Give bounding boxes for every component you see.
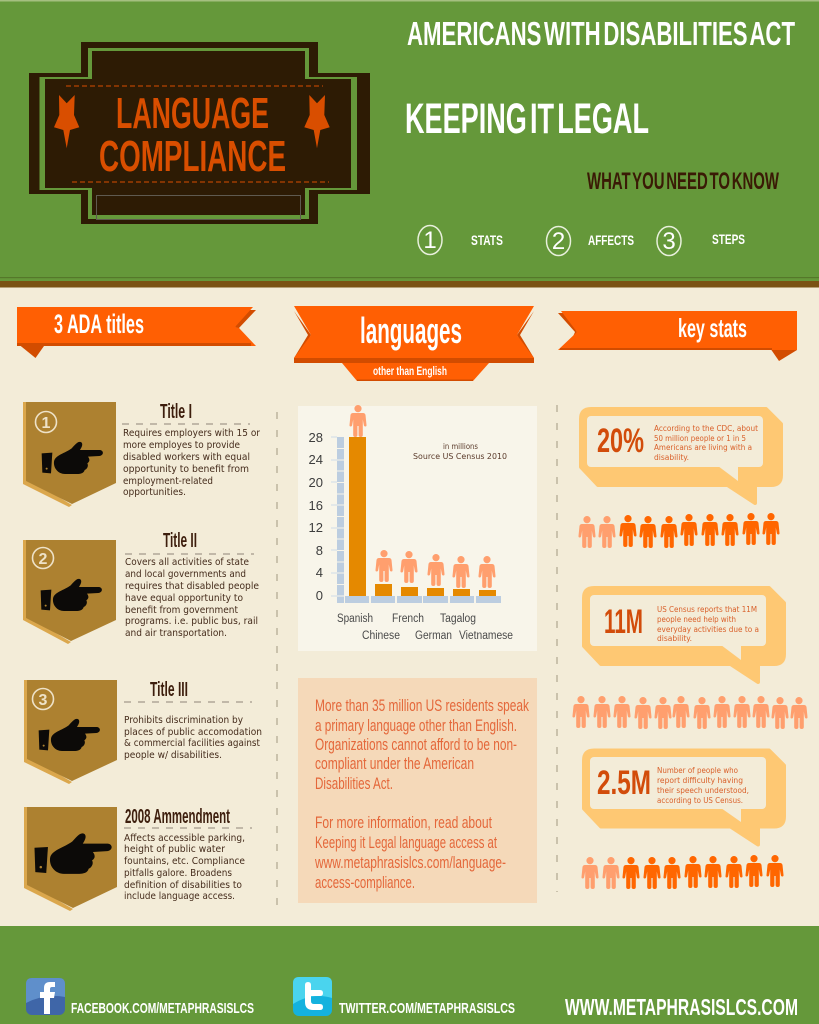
chart axis xyxy=(331,437,501,603)
callout: 20 percent: disability. xyxy=(654,453,689,462)
icon: left star xyxy=(54,95,79,148)
callout: 11M: everyday activities due to a xyxy=(657,625,759,634)
panel: title II xyxy=(23,530,259,644)
badge title: LANGUAGE xyxy=(116,89,269,138)
heading: keeping it legal: KEEPING IT LEGAL xyxy=(405,95,649,143)
text: facebook url: FACEBOOK.COM/METAPHRASISLCS xyxy=(71,1000,254,1017)
icon: chevron with pointing hand 2 xyxy=(23,540,116,644)
icon: chevron with pointing hand 2: 2 xyxy=(39,551,48,568)
label: steps: STEPS xyxy=(712,231,745,247)
chart axis labels: 20 xyxy=(309,475,323,490)
callout: 2.5M: their speech understood, xyxy=(657,786,749,795)
chart category labels: Chinese xyxy=(362,630,400,642)
text: title II description: and air transportation. xyxy=(125,628,227,639)
chart category labels: Tagalog xyxy=(440,613,476,625)
chart axis labels: 4 xyxy=(316,565,323,580)
people row: 2 of 10 xyxy=(578,513,780,548)
chart axis labels: 28 xyxy=(309,430,323,445)
callout: 20 percent: 50 million people or 1 in 5 xyxy=(654,434,746,443)
text: amendment description: fountains, etc. Compliance xyxy=(124,856,245,867)
text: amendment description xyxy=(124,833,245,902)
panel: 2008 amendment xyxy=(24,806,252,911)
ribbon: languages xyxy=(294,306,534,381)
text: title II description: programs. i.e. public bus, rail xyxy=(125,616,258,627)
panel: language access note: Organizations cannot afford to be non- xyxy=(315,735,517,754)
heading: title II: Title II xyxy=(163,530,197,552)
text: title I description xyxy=(123,428,260,498)
ribbon: languages: languages xyxy=(360,310,462,351)
icon: number 1 xyxy=(418,226,442,254)
chart axis labels: 24 xyxy=(309,452,323,467)
header band xyxy=(0,0,819,288)
icon: chevron with pointing hand 1 xyxy=(23,402,116,507)
badge: language compliance xyxy=(29,42,370,224)
panel: language access note: For more information, read about xyxy=(315,813,492,832)
icon: number 2: 2 xyxy=(552,228,565,255)
panel: language access note: compliant under the American xyxy=(315,754,474,773)
callout: 11M: 11M xyxy=(604,603,643,641)
text: title I description: opportunity to benefit from xyxy=(123,464,249,475)
chart axis labels: 16 xyxy=(309,498,323,513)
text: title I description: more employes to provide xyxy=(123,440,240,451)
icon: facebook xyxy=(26,978,65,1015)
panel: title III xyxy=(24,679,262,784)
callout: 11M: disability. xyxy=(657,634,692,643)
section index xyxy=(418,226,745,256)
ribbon: 3 ADA titles: 3 ADA titles xyxy=(54,309,144,339)
text: title I description: Requires employers with 15 or xyxy=(123,428,260,439)
ribbon: 3 ADA titles xyxy=(17,307,256,358)
icon: number 3: 3 xyxy=(662,228,676,255)
callout: 2.5M xyxy=(584,750,784,844)
text: title II description: and local governments and xyxy=(125,569,246,580)
panel: language access note: a primary language other than English. xyxy=(315,716,517,735)
chart note xyxy=(413,442,507,461)
heading: title I: Title I xyxy=(160,401,192,423)
callout: 20 percent xyxy=(581,409,781,503)
chart category labels xyxy=(337,613,513,642)
panel: language access note: Keeping it Legal language access at xyxy=(315,833,497,852)
chart category labels: Spanish xyxy=(337,613,373,625)
text: title II description: have equal opportunity to xyxy=(125,593,243,604)
heading: title III: Title III xyxy=(150,679,188,701)
footer band xyxy=(0,926,819,1024)
text: title I description: disabled workers with equal xyxy=(123,452,250,463)
text: title II description: requires that disabled people xyxy=(125,581,259,592)
text: title III description: people w/ disabilities. xyxy=(124,750,222,761)
icon: chevron with pointing hand 4 xyxy=(24,807,117,911)
callout: 2.5M: Number of people who xyxy=(657,766,738,775)
icon: chevron with pointing hand 3: 3 xyxy=(39,692,48,709)
text: twitter url: TWITTER.COM/METAPHRASISLCS xyxy=(339,1000,515,1017)
callout: 2.5M: 2.5M xyxy=(597,764,651,802)
text: amendment description: height of public water xyxy=(124,844,225,855)
ribbon: languages: other than English xyxy=(373,364,447,378)
callout: 11M: US Census reports that 11M xyxy=(657,605,757,614)
icon: right star xyxy=(304,95,330,148)
text: title I description: employment-related xyxy=(123,476,213,487)
chart category labels: French xyxy=(392,613,424,625)
text: title III description xyxy=(124,715,262,761)
callout: 11M xyxy=(584,588,784,682)
chart axis labels xyxy=(309,430,323,603)
chart person icons xyxy=(349,405,496,588)
chart category labels: German xyxy=(415,630,452,642)
panel: title I xyxy=(23,401,260,507)
label: affects: AFFECTS xyxy=(588,232,634,248)
chart axis labels: 0 xyxy=(316,588,323,603)
callout: 20 percent: 20% xyxy=(597,422,644,460)
icon: chevron with pointing hand 3 xyxy=(24,680,117,784)
chart category labels: Vietnamese xyxy=(459,630,513,642)
text: title II description: Covers all activities of state xyxy=(125,557,249,568)
panel: language access note: Disabilities Act. xyxy=(315,774,393,793)
chart axis labels: 8 xyxy=(316,543,323,558)
callout: 11M: people need help with xyxy=(657,615,736,624)
divider: right dashed line xyxy=(556,405,558,892)
label: stats: STATS xyxy=(471,232,503,248)
text: title I description: opportunities. xyxy=(123,487,186,498)
heading: 2008 ammendment: 2008 Ammendment xyxy=(125,806,230,828)
ribbon: key stats: key stats xyxy=(678,313,747,343)
icon: number 2 xyxy=(546,226,570,256)
icon: twitter xyxy=(293,977,332,1016)
panel: language access note xyxy=(298,678,537,903)
text: amendment description: definition of disabilities to xyxy=(124,880,242,891)
text: amendment description: pitfalls galore. Broadens xyxy=(124,868,232,879)
text: title III description: Prohibits discrimination by xyxy=(124,715,243,726)
ribbon: key stats xyxy=(558,311,797,361)
badge: language compliance: COMPLIANCE xyxy=(99,132,286,181)
callout: 2.5M: report difficulty having xyxy=(657,776,743,785)
callout: 20 percent: Americans are living with a xyxy=(654,443,752,452)
icon: number 1: 1 xyxy=(423,227,437,254)
chart note: in millions xyxy=(443,442,478,451)
panel: language access note: www.metaphrasislcs.com/language- xyxy=(314,853,506,872)
icon: number 3 xyxy=(657,226,681,256)
divider: left dashed line xyxy=(276,412,278,905)
people row: 2 of 10 lower xyxy=(581,855,784,889)
text: title II description: benefit from government xyxy=(125,605,238,616)
panel: languages bar chart xyxy=(298,405,537,651)
panel: language access note: More than 35 million US residents speak xyxy=(315,696,529,715)
icon: chevron with pointing hand 1: 1 xyxy=(42,415,51,432)
text: amendment description: Affects accessible parking, xyxy=(124,833,245,844)
panel: language access note: access-compliance. xyxy=(315,873,415,892)
text: title III description: & commercial facilities against xyxy=(124,738,260,749)
callout: 2.5M: according to US Census. xyxy=(657,796,743,805)
text: title III description: places of public accomodation xyxy=(124,727,262,738)
chart note: Source US Census 2010 xyxy=(413,452,507,461)
chart bars xyxy=(349,437,496,596)
callout: 20 percent: According to the CDC, about xyxy=(654,424,758,433)
chart axis labels: 12 xyxy=(309,520,323,535)
text: amendment description: include language access. xyxy=(124,891,235,902)
text: title II description xyxy=(125,557,259,639)
people row: all salmon xyxy=(572,696,808,729)
